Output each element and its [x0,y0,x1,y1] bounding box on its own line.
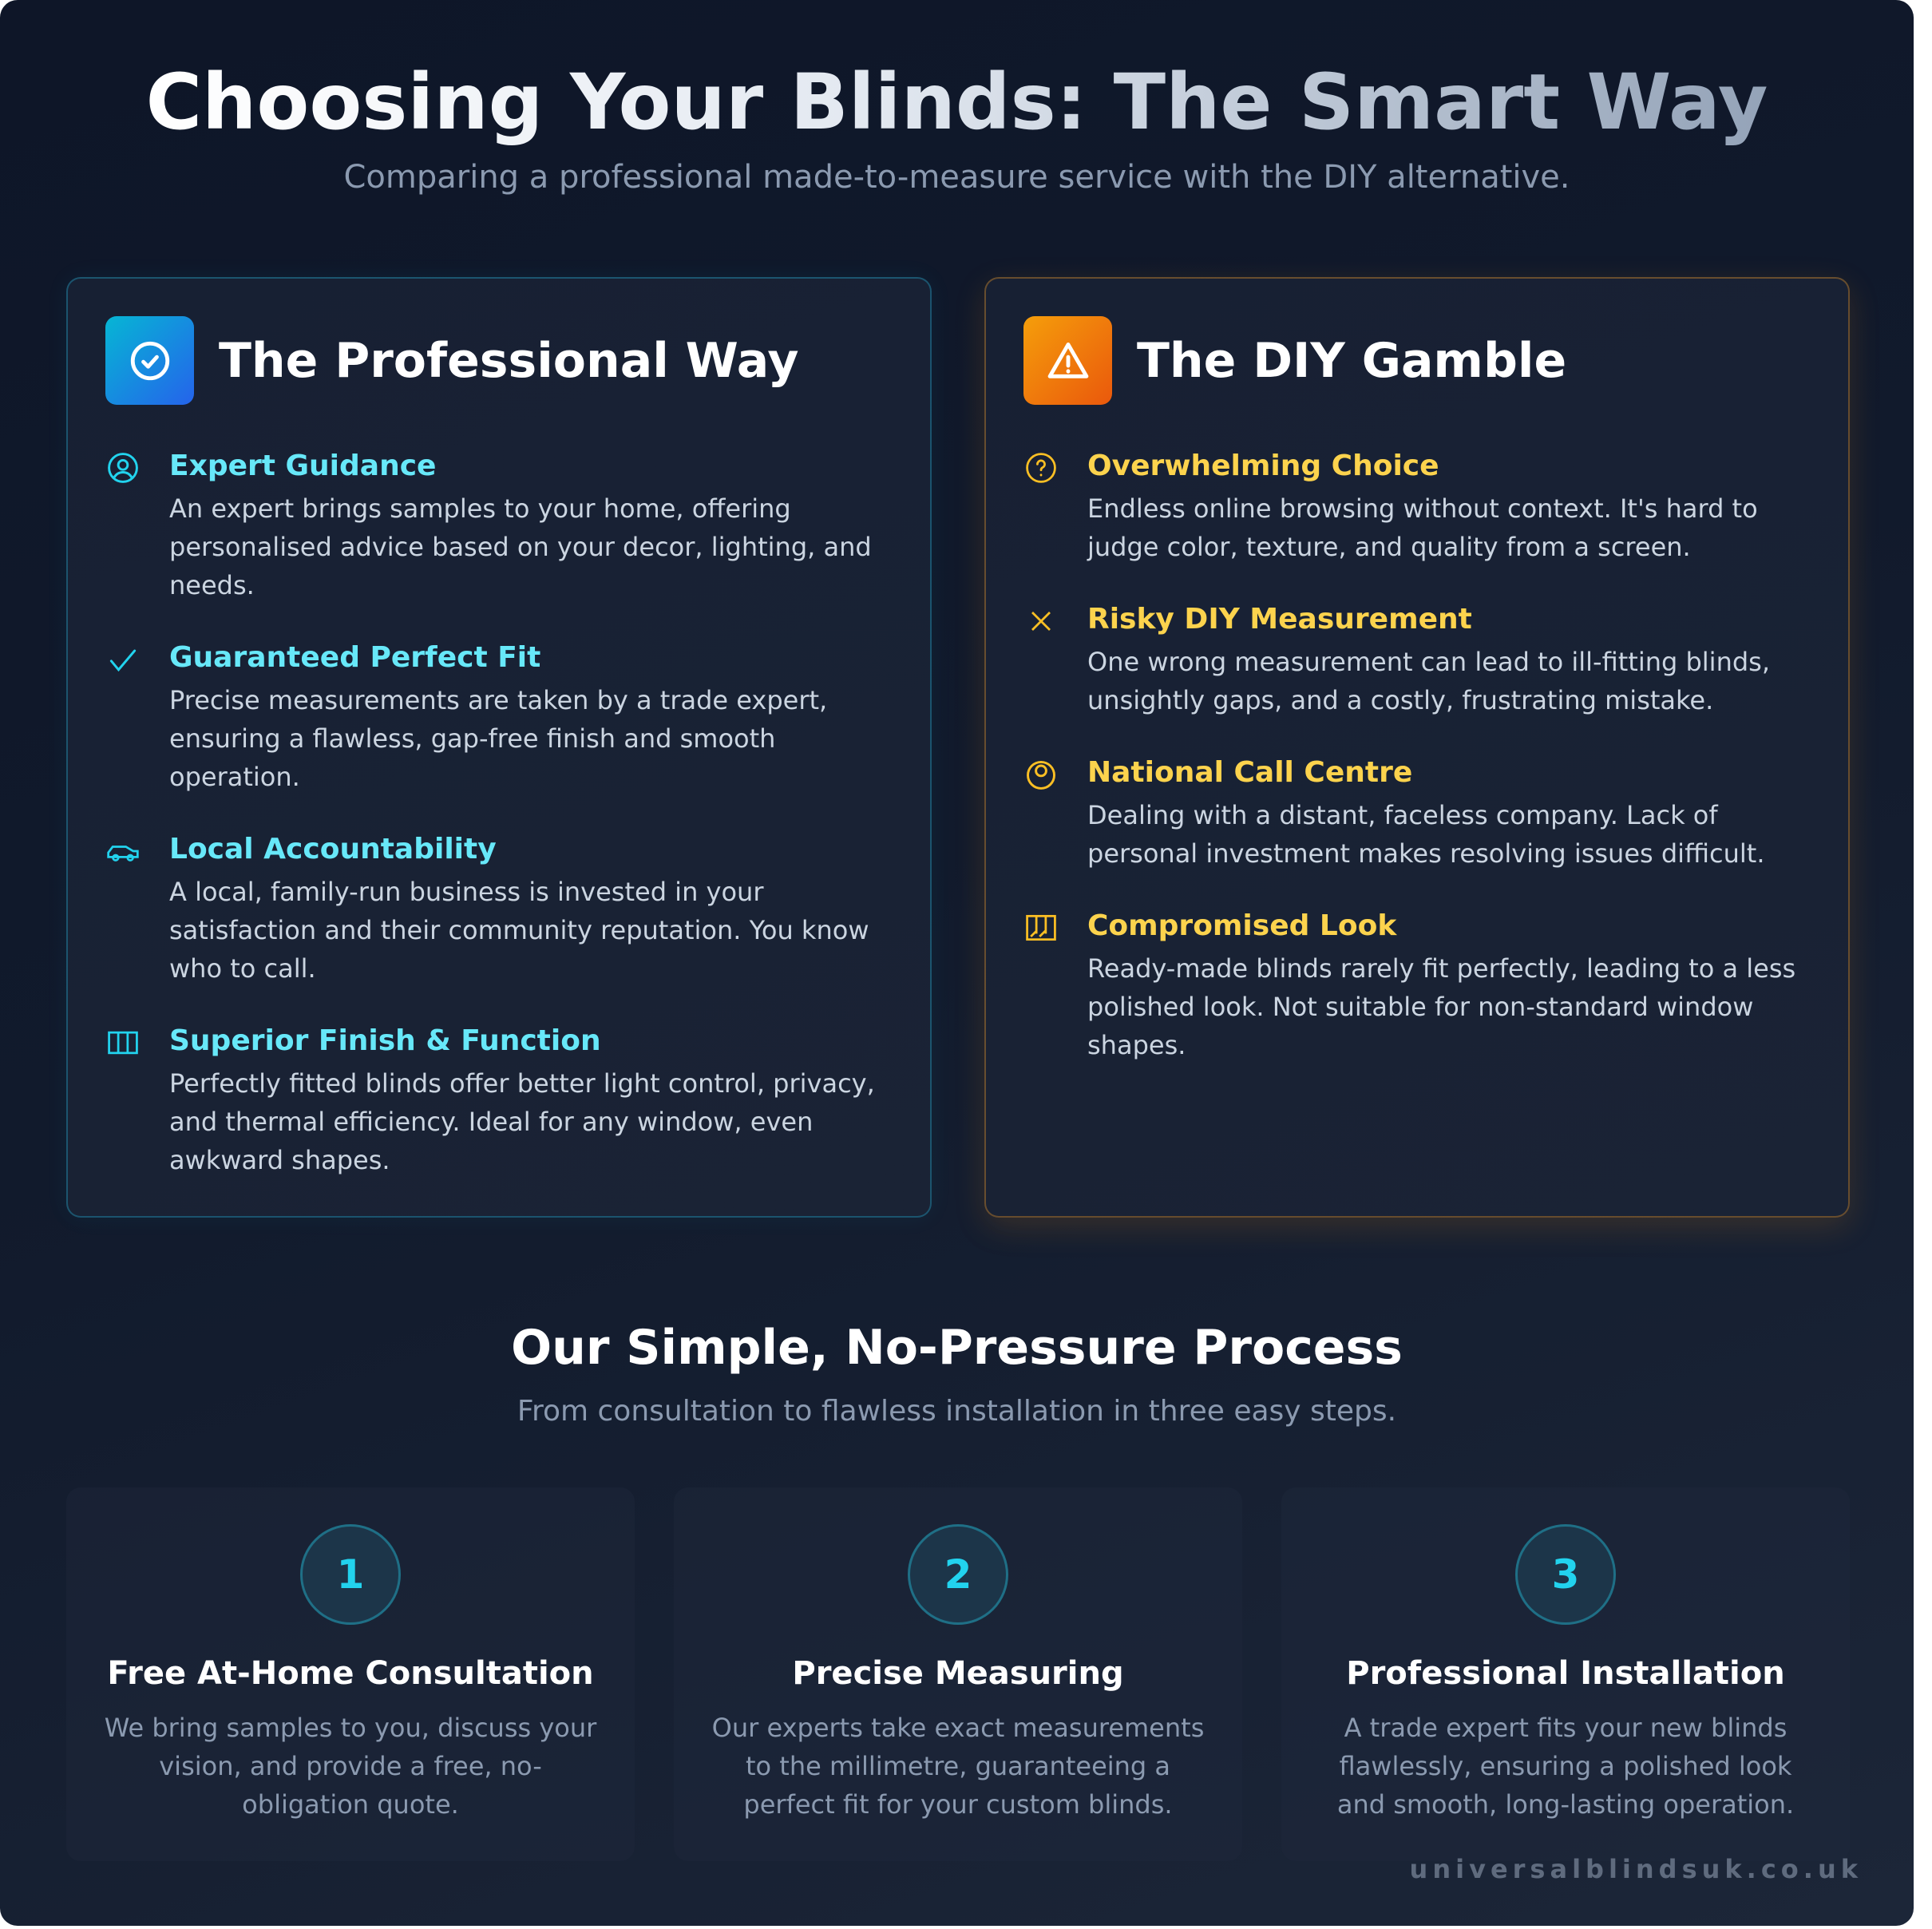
item: overwhelming choice [1026,450,1758,562]
item: risky measurement: Risky DIY Measurement [1087,603,1472,636]
item: superior finish [108,1024,875,1175]
step 3 card: Professional Installation [1346,1655,1785,1692]
icon: broken blinds [1026,915,1056,941]
panel header: professional [105,316,798,405]
item: overwhelming choice: Endless online browsing without context. It's hard to judge color, texture, and quality from a screen. [1087,493,1758,562]
panel header: DIY: The DIY Gamble [1137,332,1566,388]
icon: blinds [108,1032,138,1054]
step number 1: 1 [337,1551,364,1598]
icon: question [1026,453,1056,483]
item: call centre: Dealing with a distant, faceless company. Lack of personal investment makes resolving issues difficult. [1087,800,1764,869]
icon: user [108,453,138,483]
step number 2: 2 [944,1551,972,1598]
icon: headset [1027,761,1055,790]
panel header: professional: The Professional Way [219,332,798,388]
step 3 card: A trade expert fits your new blinds flawlessly, ensuring a polished look and smooth, long-lasting operation. [1337,1713,1794,1820]
icon: van [107,846,139,862]
step 2 card: Precise Measuring [792,1655,1124,1692]
icon: check badge [105,316,194,405]
item: superior finish: Superior Finish & Function [169,1024,601,1057]
panel: professional way [66,277,932,1218]
step number 1 [300,1524,401,1625]
icon: check [110,650,136,671]
step number 3 [1515,1524,1616,1625]
item: perfect fit [110,641,827,792]
step 1 card: Free At-Home Consultation [107,1655,594,1692]
subtitle: Comparing a professional made-to-measure service with the DIY alternative. [343,159,1570,196]
step 3 card [1281,1487,1850,1861]
item: superior finish: Perfectly fitted blinds offer better light control, privacy, and thermal efficiency. Ideal for any window, even awkward shapes. [169,1068,875,1175]
item: compromised look [1026,909,1795,1060]
item: local accountability: Local Accountability [169,833,497,865]
item: local accountability: A local, family-run business is invested in your satisfaction and their community reputation. You know who to call. [169,877,869,984]
item: compromised look: Ready-made blinds rarely fit perfectly, leading to a less polished look. Not suitable for non-standard window shapes. [1087,953,1795,1060]
step number 3: 3 [1552,1551,1579,1598]
item: perfect fit: Guaranteed Perfect Fit [169,641,540,674]
item: expert guidance: An expert brings samples to your home, offering personalised advice based on your decor, lighting, and needs. [169,493,872,600]
icon: cross [1031,612,1051,631]
title: Choosing Your Blinds: The Smart Way [146,57,1768,147]
item: expert guidance: Expert Guidance [169,450,436,482]
item: call centre: National Call Centre [1087,756,1412,789]
step 2 card: Our experts take exact measurements to the millimetre, guaranteeing a perfect fit for your custom blinds. [712,1713,1204,1820]
panel header: DIY [1023,316,1566,405]
item: risky measurement: One wrong measurement can lead to ill-fitting blinds, unsightly gaps, and a costly, frustrating mistake. [1087,647,1770,715]
step 1 card: We bring samples to you, discuss your vision, and provide a free, no-obligation quote. [105,1713,596,1820]
heading: process: Our Simple, No-Pressure Process [511,1320,1403,1376]
item: expert guidance [108,450,872,600]
step 1 card [66,1487,635,1861]
item: call centre [1027,756,1764,869]
item: compromised look: Compromised Look [1087,909,1396,942]
item: overwhelming choice: Overwhelming Choice [1087,450,1439,482]
footer url: universalblindsuk.co.uk [1410,1854,1863,1884]
subheading: process: From consultation to flawless installation in three easy steps. [517,1395,1396,1428]
step 2 card [674,1487,1242,1861]
item: local accountability [107,833,869,984]
item: perfect fit: Precise measurements are taken by a trade expert, ensuring a flawless, gap-free finish and smooth operation. [169,685,827,792]
panel: DIY gamble [984,277,1850,1218]
item: risky measurement [1031,603,1770,715]
step number 2 [908,1524,1008,1625]
icon: warning [1023,316,1112,405]
